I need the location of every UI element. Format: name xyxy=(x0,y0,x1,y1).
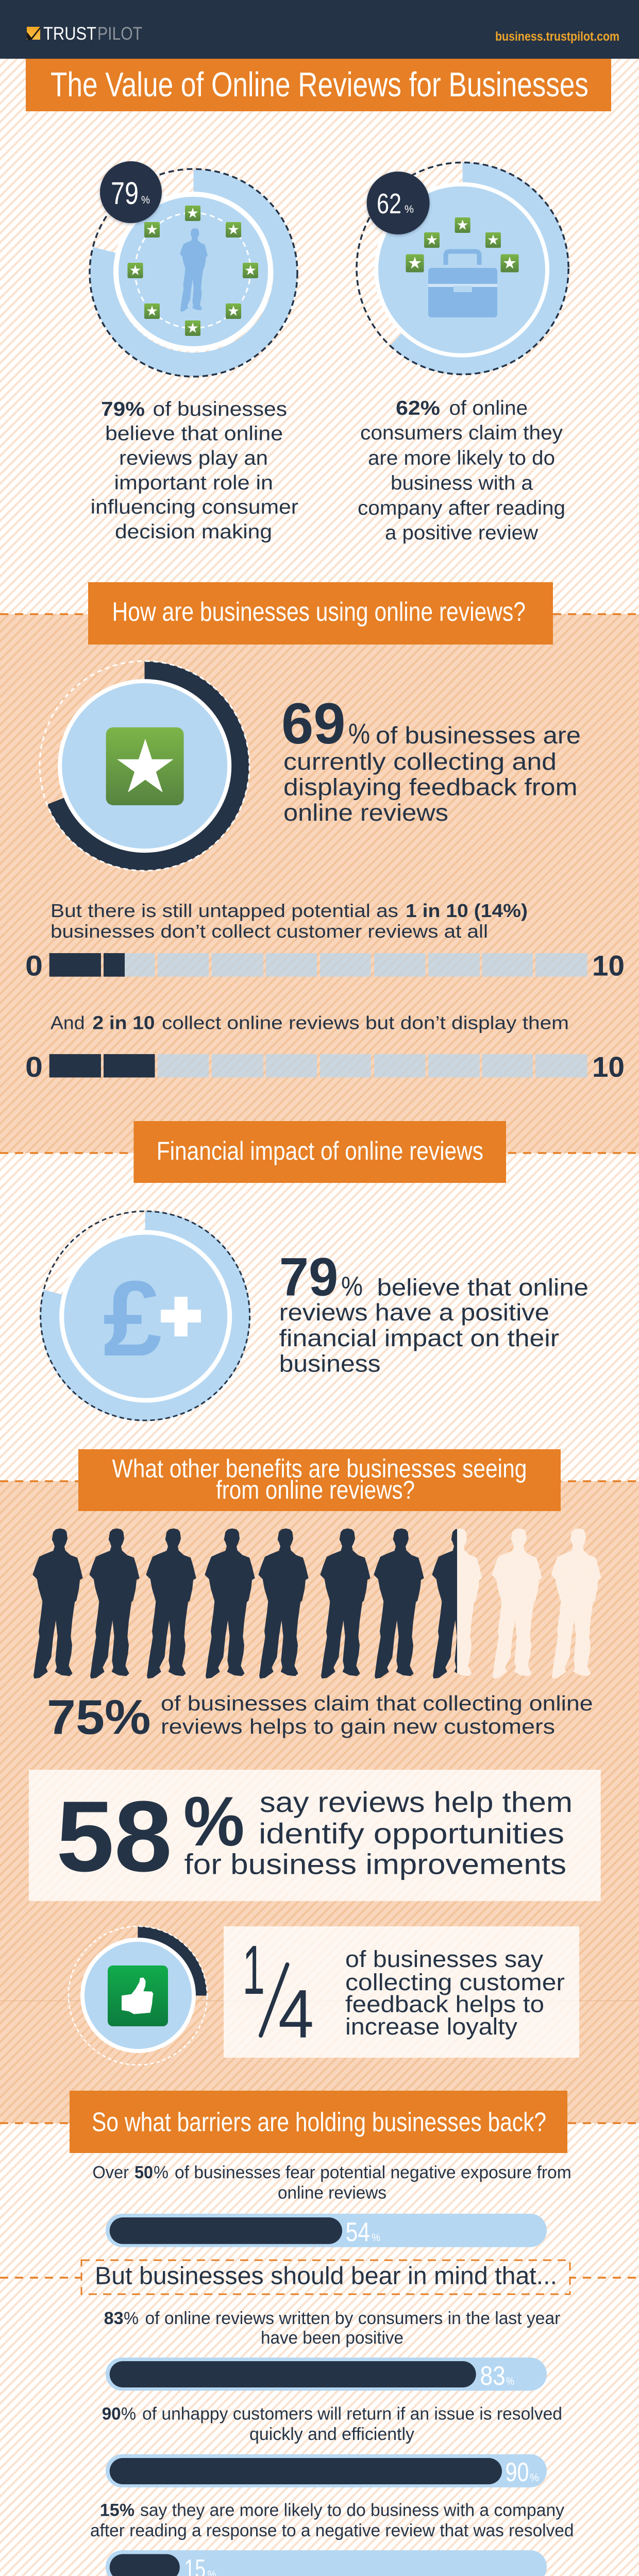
heading: financial impact xyxy=(133,1121,506,1183)
stat: 75% new customers: of businesses claim that collecting online xyxy=(161,1691,593,1715)
logo: Trustpilot: PILOT xyxy=(97,24,142,44)
stat: 79% financial impact: % xyxy=(341,1271,363,1301)
stat: 69% of businesses xyxy=(281,691,581,826)
panel: 58% opportunities: identify opportunities xyxy=(259,1817,564,1850)
text block: 1 in 10 xyxy=(51,900,528,942)
text block: 79% of businesses: important role in xyxy=(114,472,273,494)
text block: 2 in 10 xyxy=(51,1012,569,1033)
panel: one quarter: collecting customer xyxy=(345,1969,565,1995)
logo: Trustpilot xyxy=(27,24,142,44)
badge: 79% xyxy=(100,161,162,223)
stat: 69% of businesses: of businesses are xyxy=(376,722,581,749)
text block: 15% negative review xyxy=(90,2500,574,2540)
stat: 75% new customers: 75% xyxy=(47,1690,151,1745)
stat: 79% financial impact: business xyxy=(279,1350,381,1377)
chart: 1 in 10 progress bar: 0 xyxy=(25,950,43,982)
text block: 83% positive: of online reviews written by consumers in the last year xyxy=(145,2309,560,2328)
panel: one quarter xyxy=(224,1926,579,2058)
chart: 54% pill xyxy=(106,2214,547,2247)
text block: 1 in 10: But there is still untapped potential as xyxy=(51,900,398,921)
text block: 2 in 10: And xyxy=(51,1012,85,1033)
text block: 62% of online consumers: of online xyxy=(449,397,528,419)
text block: 15% negative review: after reading a response to a negative review that was resolved xyxy=(90,2521,574,2540)
text block: 79% of businesses: of businesses xyxy=(153,398,287,420)
heading: financial impact: Financial impact of online reviews xyxy=(157,1137,483,1165)
text block: 83% positive xyxy=(104,2309,560,2348)
text block: 62% of online consumers: are more likely to do xyxy=(368,447,555,469)
heading: barriers: So what barriers are holding businesses back? xyxy=(92,2108,546,2138)
text block: 90% return: quickly and efficiently xyxy=(249,2425,414,2444)
text block: 90% return: of unhappy customers will return if an issue is resolved xyxy=(142,2404,562,2424)
text block: 15% negative review: % xyxy=(120,2500,134,2520)
text block: 83% positive: % xyxy=(124,2309,139,2328)
panel: 58% opportunities: say reviews help them xyxy=(260,1786,573,1818)
icon: briefcase xyxy=(428,251,497,317)
text block: 83% positive: 83 xyxy=(104,2309,124,2328)
chart: 54% pill: 54 xyxy=(346,2217,370,2247)
chart: 54% pill: % xyxy=(372,2232,380,2244)
text block: over 50%: 50 xyxy=(134,2163,153,2182)
logo: Trustpilot: TRUST xyxy=(43,24,96,44)
panel: 69% donut xyxy=(40,661,249,871)
callout: but businesses should bear in mind: But businesses should bear in mind that... xyxy=(95,2263,557,2290)
stat: 69% of businesses: % xyxy=(348,717,370,750)
text block: over 50%: Over xyxy=(93,2163,129,2182)
chart: 1 in 10 progress bar xyxy=(25,950,625,982)
badge: 79%: 79 xyxy=(111,176,139,211)
stat: 69% of businesses: online reviews xyxy=(283,799,448,826)
icon: green star tile xyxy=(106,727,184,805)
text block: 62% of online consumers: 62% xyxy=(396,397,440,419)
text block: 62% of online consumers: business with a xyxy=(391,472,533,495)
text block: 79% of businesses: reviews play an xyxy=(119,447,268,469)
badge: 79%: % xyxy=(141,194,150,206)
panel: one quarter: 1 xyxy=(242,1931,265,2009)
chart: 2 in 10 progress bar xyxy=(25,1050,625,1083)
text block: 90% return: % xyxy=(121,2404,136,2424)
badge: 62%: % xyxy=(405,204,414,215)
chart: 2 in 10 progress bar: 0 xyxy=(25,1050,43,1083)
chart: 90% pill: 90 xyxy=(506,2458,529,2487)
text block: 1 in 10: 1 in 10 (14%) xyxy=(406,900,528,921)
panel: 58% opportunities xyxy=(29,1770,601,1901)
heading: barriers xyxy=(70,2091,567,2153)
text block: 62% of online consumers: company after reading xyxy=(358,497,565,519)
stat: 79% financial impact: financial impact on their xyxy=(279,1325,559,1351)
panel: 62% donut xyxy=(357,162,568,375)
chart: 2 in 10 progress bar: 10 xyxy=(592,1050,625,1083)
text block: over 50%: % xyxy=(154,2163,169,2182)
chart: 83% pill: % xyxy=(506,2376,514,2387)
icons: stars in ring xyxy=(128,206,258,336)
heading: other benefits: What other benefits are businesses seeing xyxy=(112,1454,527,1483)
heading: how are businesses using online reviews xyxy=(88,582,553,645)
chart: 90% pill: % xyxy=(530,2472,539,2484)
heading: other benefits xyxy=(78,1449,561,1511)
text block: 79% of businesses: influencing consumer xyxy=(91,496,298,518)
text block: 90% return xyxy=(102,2404,562,2444)
chart: 83% pill: 83 xyxy=(480,2361,506,2391)
text block: over 50% xyxy=(93,2163,571,2203)
text block: 1 in 10: businesses don’t collect customer reviews at all xyxy=(51,921,488,942)
stat: 69% of businesses: 69 xyxy=(281,691,346,756)
panel: thumbs up donut xyxy=(69,1926,207,2065)
panel: 58% opportunities: % xyxy=(183,1782,244,1860)
header bar xyxy=(0,0,639,59)
chart: 1 in 10 progress bar: 10 xyxy=(592,950,625,982)
panel: one quarter: increase loyalty xyxy=(345,2013,518,2040)
heading: how are businesses using online reviews: How are businesses using online reviews? xyxy=(112,597,526,627)
panel: one quarter: of businesses say xyxy=(345,1946,544,1972)
text block: 15% negative review: say they are more likely to do business with a company xyxy=(140,2500,564,2520)
text block: over 50%: online reviews xyxy=(278,2183,386,2203)
text block: 62% of online consumers xyxy=(358,397,565,544)
stat: 75% new customers xyxy=(47,1690,593,1745)
stat: 79% financial impact xyxy=(279,1247,588,1377)
icon: pound plus: £ xyxy=(103,1259,162,1379)
text block: 90% return: 90 xyxy=(102,2404,121,2424)
text block: 15% negative review: 15 xyxy=(100,2500,120,2520)
chart: 83% pill xyxy=(106,2358,547,2391)
badge: 62%: 62 xyxy=(377,188,401,219)
chart: people silhouettes 75% xyxy=(32,1529,601,1679)
title xyxy=(26,59,611,111)
text block: 79% of businesses xyxy=(91,398,298,543)
chart: 15% pill xyxy=(106,2550,547,2576)
panel: one quarter: feedback helps to xyxy=(345,1991,544,2018)
heading: other benefits: from online reviews? xyxy=(216,1476,415,1504)
panel: 79% financial donut xyxy=(41,1211,250,1420)
text block: 62% of online consumers: consumers claim they xyxy=(360,422,563,444)
stat: 79% financial impact: believe that online xyxy=(377,1274,588,1300)
stat: 79% financial impact: reviews have a positive xyxy=(279,1299,549,1326)
panel: 58% opportunities: 58 xyxy=(56,1781,172,1893)
text block: 79% of businesses: decision making xyxy=(115,521,272,543)
chart: 90% pill xyxy=(106,2454,547,2487)
text block: 79% of businesses: 79% xyxy=(101,398,145,420)
icon: pound plus xyxy=(103,1259,201,1379)
panel: 79% donut xyxy=(90,161,297,377)
icons: stars xyxy=(406,217,519,273)
panel: one quarter: 4 xyxy=(278,1976,314,2053)
stat: 69% of businesses: displaying feedback from xyxy=(283,774,578,801)
text block: 2 in 10: 2 in 10 xyxy=(93,1012,155,1033)
stat: 75% new customers: reviews helps to gain new customers xyxy=(161,1715,555,1738)
stat: 79% financial impact: 79 xyxy=(279,1247,338,1307)
text block: 83% positive: have been positive xyxy=(261,2328,403,2348)
badge: 62% xyxy=(367,172,430,234)
text block: 2 in 10: collect online reviews but don’t display them xyxy=(162,1012,569,1033)
icon: person xyxy=(180,228,208,312)
panel: 58% opportunities: for business improvements xyxy=(184,1848,566,1880)
text block: 79% of businesses: believe that online xyxy=(105,422,283,445)
header url: business.trustpilot.com xyxy=(495,29,619,44)
text block: over 50%: of businesses fear potential negative exposure from xyxy=(175,2163,571,2182)
stat: 69% of businesses: currently collecting and xyxy=(283,748,557,775)
icon: thumbs up xyxy=(108,1965,168,2026)
text block: 62% of online consumers: a positive review xyxy=(385,522,539,544)
